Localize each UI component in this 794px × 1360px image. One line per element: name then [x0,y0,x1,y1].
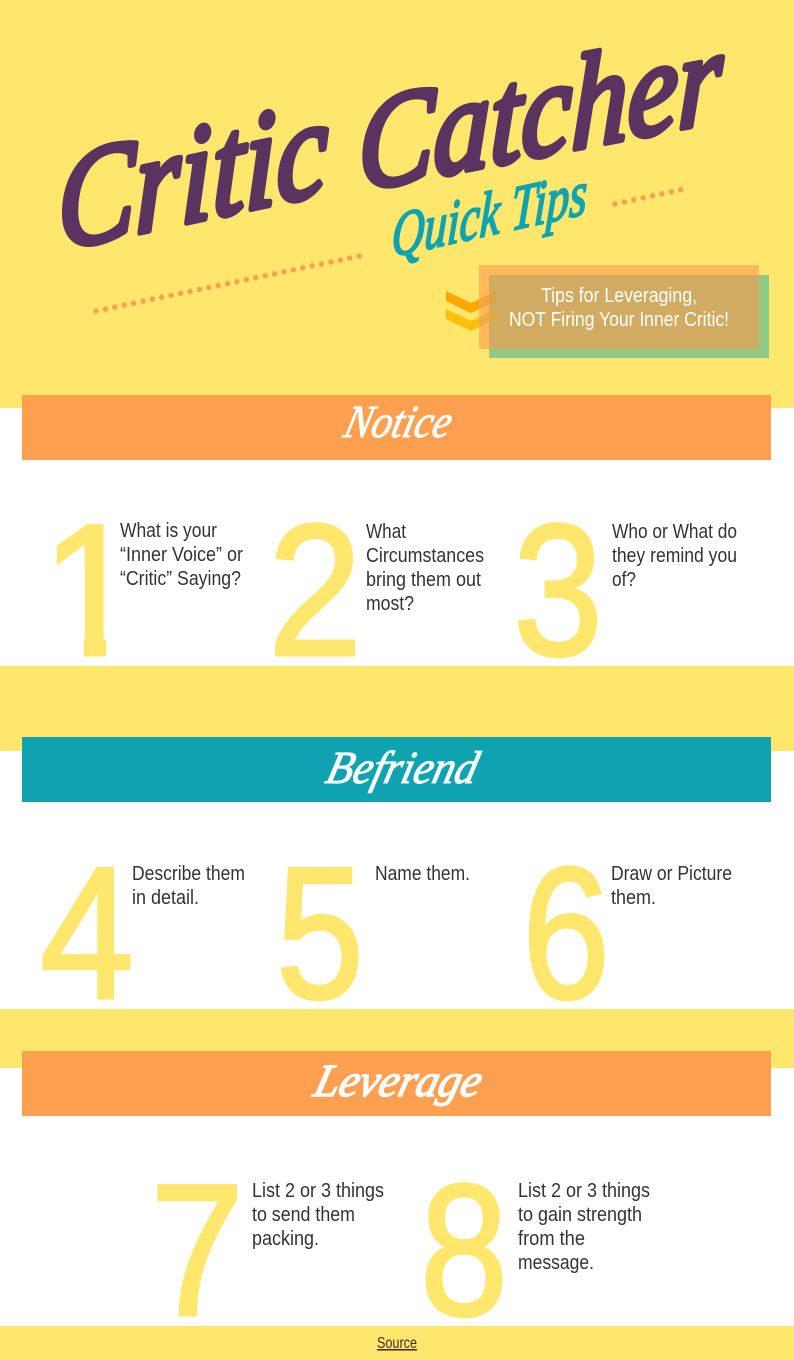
heading: Befriend: Befriend [321,743,485,794]
step 7: to send them [252,1204,355,1226]
step 6: Draw or Picture [611,863,732,885]
title: Critic [58,68,328,281]
background band: middle two [0,1009,794,1068]
callout: tagline box: Tips for Leveraging, [541,285,697,307]
step 2: 2 [268,485,362,695]
heading: Befriend [22,737,771,802]
step 2: Circumstances [366,545,484,567]
step 3: of? [612,569,636,591]
background band: middle one [0,666,794,751]
step 2: bring them out [366,569,481,591]
footer band [0,1326,794,1360]
heading: Notice [22,395,771,460]
dotted line right [615,188,686,204]
heading: Notice: Notice [338,397,458,448]
step 4: in detail. [132,887,199,909]
subtitle: Quick Tips [390,157,589,271]
step 2: most? [366,593,414,615]
background band: header [0,0,794,408]
step 8: List 2 or 3 things [518,1180,650,1202]
source link: Source [377,1335,417,1352]
step 4: 4 [40,828,134,1038]
step 1: What is your [120,520,217,542]
step 6: them. [611,887,656,909]
callout: tagline box: NOT Firing Your Inner Critic! [509,309,729,331]
step 5: 5 [276,828,364,1038]
heading: Leverage: Leverage [308,1056,488,1107]
step 8 [420,1145,650,1355]
step 7: 7 [150,1145,244,1355]
step 6 [522,828,732,1038]
step 1: 1 [41,485,141,695]
heading: Leverage [22,1051,771,1116]
step 2 [268,485,484,695]
step 2: What [366,521,406,543]
step 3: they remind you [612,545,737,567]
dotted line left [96,256,362,311]
step 5: Name them. [375,863,470,885]
step 3: 3 [513,485,603,695]
step 7: packing. [252,1228,319,1250]
step 8: from the [518,1228,585,1250]
step 7: List 2 or 3 things [252,1180,384,1202]
step 4: Describe them [132,863,245,885]
step 8: message. [518,1252,594,1274]
title [58,0,724,281]
step 7 [150,1145,384,1355]
step 5 [276,828,470,1038]
step 4 [40,828,245,1038]
step 6: 6 [522,828,610,1038]
step 1: “Critic” Saying? [120,568,241,590]
step 1: “Inner Voice” or [120,544,243,566]
step 1 [56,522,243,656]
step 3: Who or What do [612,521,737,543]
step 8: to gain strength [518,1204,642,1226]
step 3 [513,485,737,695]
step 8: 8 [420,1145,508,1355]
icon: double chevron [446,291,496,331]
callout: tagline box [479,265,769,358]
